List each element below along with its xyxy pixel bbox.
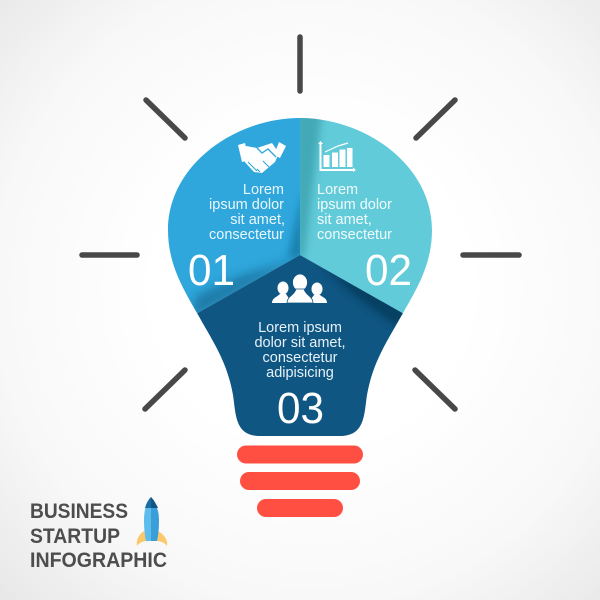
segment 03 bbox=[197, 255, 403, 436]
text: segment 03: dolor sit amet, bbox=[254, 335, 346, 351]
icon: handshake bbox=[238, 142, 286, 173]
icon: people bbox=[272, 274, 327, 303]
segment 02 bbox=[300, 118, 432, 314]
number 02: 02 bbox=[365, 246, 412, 295]
seam shadow on segment 01 bbox=[286, 199, 300, 260]
text: segment 03 bbox=[254, 320, 346, 381]
text: segment 01 bbox=[209, 182, 285, 243]
text: segment 01: consectetur bbox=[209, 227, 284, 243]
text: segment 02: ipsum dolor bbox=[317, 197, 392, 213]
bulb base bars bbox=[237, 446, 363, 517]
number 01: 01 bbox=[188, 246, 235, 295]
text: segment 02 bbox=[317, 182, 392, 243]
text: segment 02: Lorem bbox=[317, 182, 358, 198]
segment 03 edge shadow bbox=[325, 270, 403, 326]
title: BUSINESS bbox=[30, 499, 128, 523]
text: segment 01: sit amet, bbox=[230, 212, 285, 228]
text: segment 02: sit amet, bbox=[317, 212, 372, 228]
light rays bbox=[82, 37, 519, 409]
segment 01 bbox=[168, 118, 300, 314]
text: segment 03: adipisicing bbox=[266, 365, 334, 381]
text: segment 03: consectetur bbox=[263, 350, 338, 366]
light bulb segments bbox=[168, 118, 432, 436]
text: segment 02: consectetur bbox=[317, 227, 392, 243]
text: segment 01: ipsum dolor bbox=[209, 197, 284, 213]
seam shadow on segment 02 bbox=[296, 112, 322, 258]
number 03: 03 bbox=[277, 384, 324, 433]
text: segment 03: Lorem ipsum bbox=[258, 320, 342, 336]
title bbox=[30, 499, 167, 572]
title: STARTUP bbox=[30, 524, 120, 548]
icon: rocket bbox=[137, 497, 167, 546]
segment 01 lower shadow bbox=[190, 258, 290, 314]
text: segment 01: Lorem bbox=[243, 182, 284, 198]
title: INFOGRAPHIC bbox=[30, 548, 167, 572]
icon: bar chart bbox=[318, 141, 356, 172]
